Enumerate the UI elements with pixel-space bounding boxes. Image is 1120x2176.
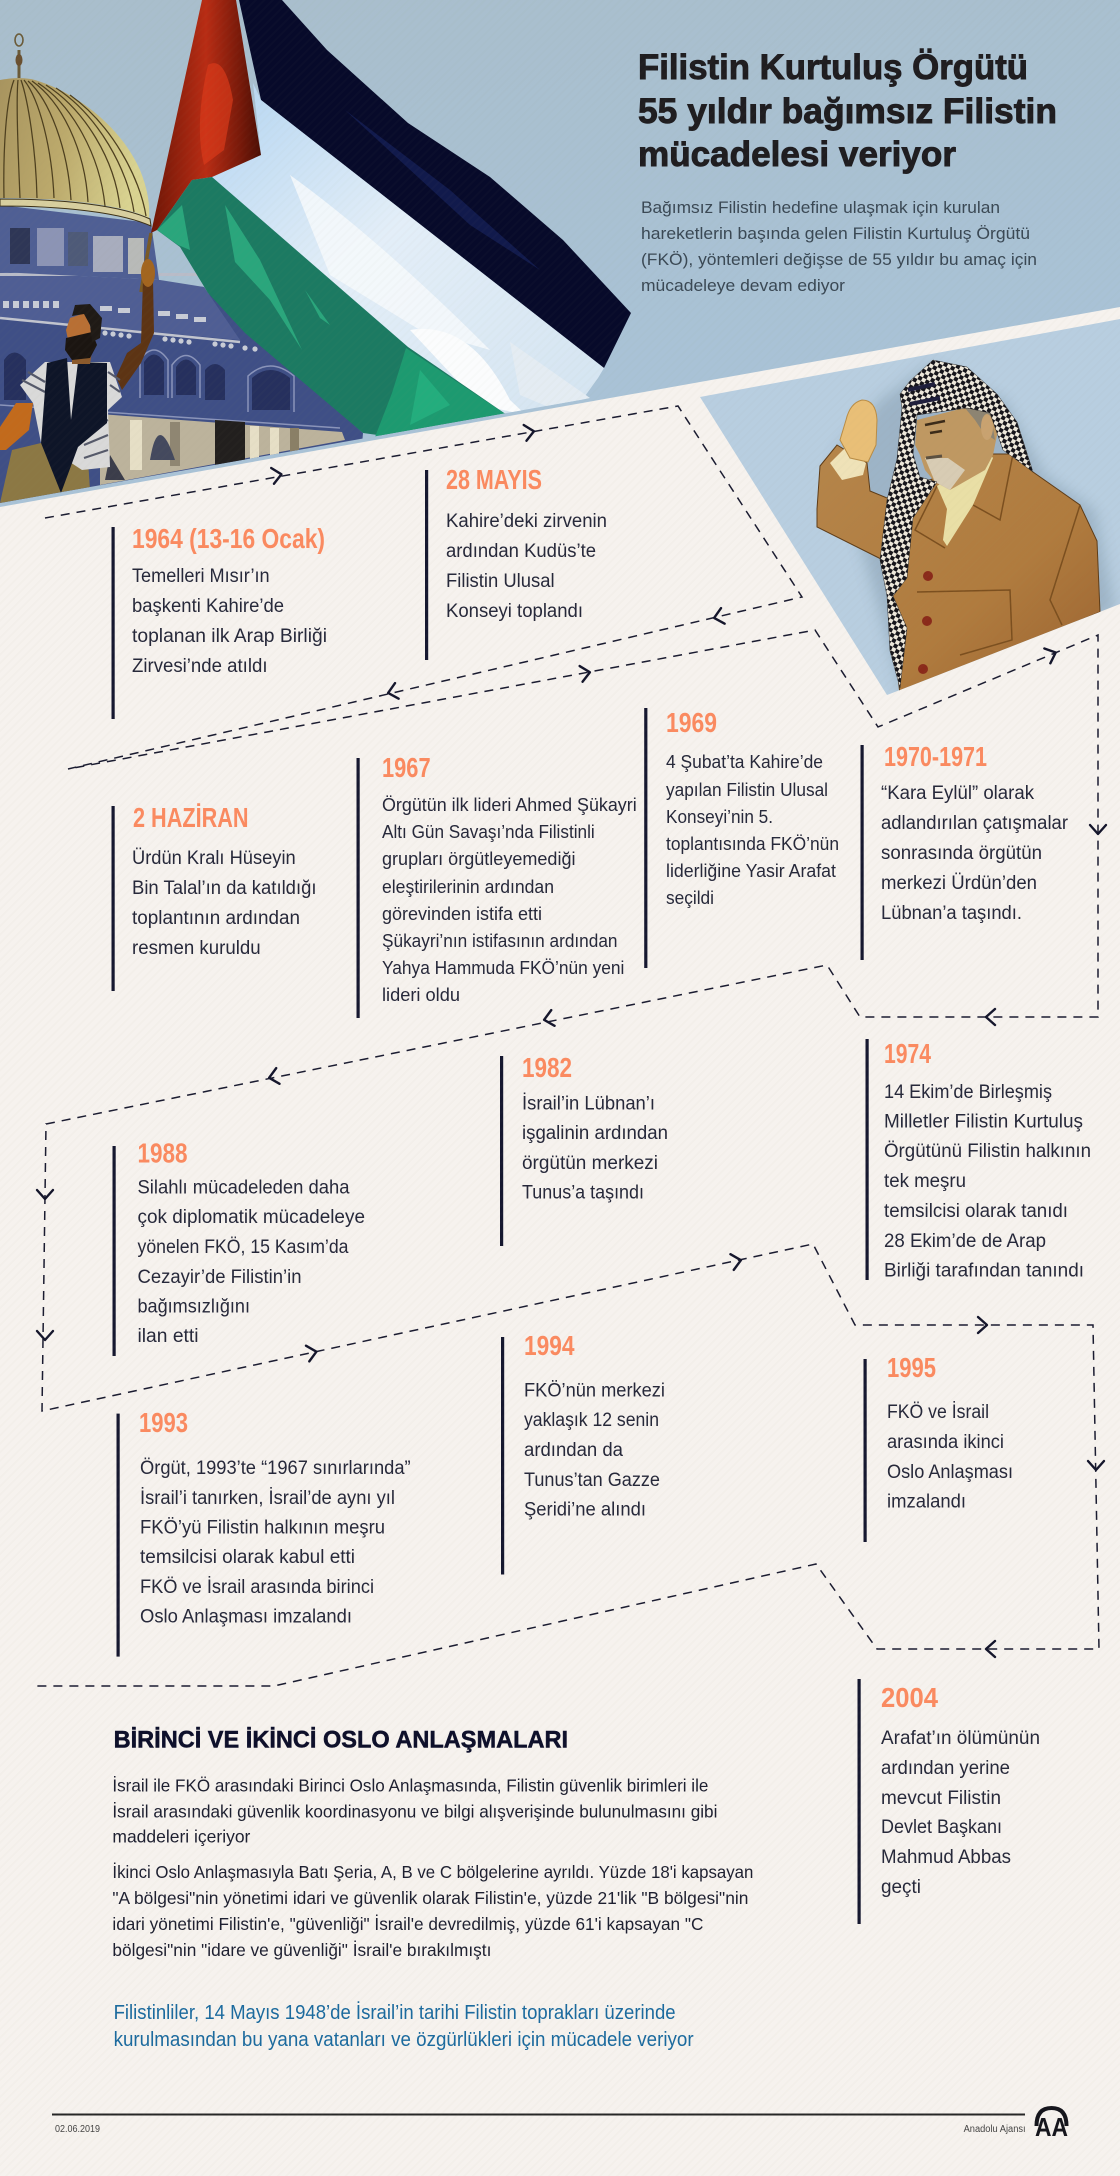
- body: 2004: ardından yerine: [881, 1758, 1010, 1779]
- oslo paragraph one: [112, 1775, 717, 1847]
- body: 1994: Tunus’tan Gazze: [524, 1470, 660, 1491]
- pants: [0, 443, 90, 503]
- body: 1970-1971: sonrasında örgütün: [881, 843, 1042, 864]
- heading: 1964: 1964 (13-16 Ocak): [132, 523, 325, 554]
- illustration: dome of the rock, protester and flag: [0, 0, 631, 510]
- body: 1967: Şükayri’nın istifasının ardından: [382, 931, 618, 951]
- portrait: yasir arafat saluting: [817, 360, 1115, 700]
- footer agency name: Anadolu Ajansı: [964, 2124, 1026, 2135]
- timeline entry: 1994: [501, 1330, 665, 1574]
- timeline entry: 1993: [116, 1407, 411, 1657]
- body: 1969: yapılan Filistin Ulusal: [666, 780, 828, 800]
- body: 1982: örgütün merkezi: [522, 1153, 658, 1174]
- body: 1982: işgalinin ardından: [522, 1123, 668, 1144]
- beard: [65, 332, 97, 360]
- title: 55 yıldır bağımsız Filistin: [638, 92, 1057, 131]
- hair: [965, 408, 995, 440]
- title: Filistin Kurtuluş Örgütü: [638, 48, 1028, 87]
- heading: 28 mayis: 28 MAYIS: [446, 464, 542, 495]
- intro text: hareketlerin başında gelen Filistin Kurtuluş Örgütü: [641, 224, 1030, 243]
- body: 2 haziran: resmen kuruldu: [132, 938, 261, 959]
- footer: [52, 2108, 1068, 2142]
- oslo paragraph two: bölgesi"nin "idare ve güvenliği" İsrail'e bırakılmıştı: [112, 1940, 491, 1960]
- body: 1970-1971: [881, 783, 1069, 924]
- cuff: [830, 448, 866, 480]
- person: protester raising flag: [0, 259, 155, 503]
- body: 1993: FKÖ ve İsrail arasında birinci: [140, 1577, 374, 1598]
- body: 1964: [132, 566, 327, 677]
- moustache: [926, 456, 942, 458]
- body: 1969: 4 Şubat’ta Kahire’de: [666, 752, 823, 772]
- eye and brow: [925, 421, 945, 433]
- body: 1994: yaklaşık 12 senin: [524, 1410, 659, 1431]
- body: 2 haziran: toplantının ardından: [132, 908, 300, 929]
- timeline path: dashed connectors with arrows: [33, 406, 1106, 1686]
- oslo paragraph two: [112, 1862, 753, 1960]
- heading: 2 haziran: 2 HAZİRAN: [133, 802, 248, 833]
- timeline entry: 1988: [112, 1138, 365, 1356]
- timeline entry: 2004: [858, 1679, 1040, 1924]
- heading: 1982: 1982: [522, 1052, 572, 1083]
- oslo heading: BİRİNCİ VE İKİNCİ OSLO ANLAŞMALARI: [114, 1727, 568, 1754]
- body: 1964: toplanan ilk Arap Birliği: [132, 626, 327, 647]
- body: 1970-1971: Lübnan’a taşındı.: [881, 903, 1022, 924]
- heading: 2004: 2004: [881, 1682, 938, 1713]
- body: 1974: tek meşru: [884, 1171, 966, 1192]
- shirt collar: [937, 454, 993, 546]
- flag: pole: [141, 233, 151, 292]
- body: 1993: Oslo Anlaşması imzalandı: [140, 1607, 352, 1628]
- beard: [925, 458, 965, 490]
- dashed route: [33, 406, 1099, 1686]
- body: 2 haziran: Ürdün Kralı Hüseyin: [132, 848, 296, 869]
- timeline entry: 1982: [500, 1052, 668, 1246]
- body: 1970-1971: adlandırılan çatışmalar: [881, 813, 1069, 834]
- body: 1982: [522, 1093, 668, 1204]
- body: 1988: ilan etti: [138, 1326, 198, 1347]
- timeline entry: 2 haziran: [112, 802, 316, 991]
- body: 28 mayis: Kahire’deki zirvenin: [446, 511, 607, 532]
- body: 28 mayis: [446, 511, 607, 622]
- body: 1967: görevinden istifa etti: [382, 904, 542, 924]
- heading: 1970-1971: 1970-1971: [884, 741, 987, 772]
- body: 1993: temsilcisi olarak kabul etti: [140, 1547, 355, 1568]
- body: 1993: FKÖ’yü Filistin halkının meşru: [140, 1517, 385, 1538]
- timeline entry: 1995: [864, 1352, 1013, 1542]
- body: 1974: temsilcisi olarak tanıdı: [884, 1201, 1068, 1222]
- body: 1967: Yahya Hammuda FKÖ’nün yeni: [382, 958, 624, 978]
- face: [915, 405, 1000, 490]
- body: 1994: ardından da: [524, 1440, 623, 1461]
- building: drum: [0, 205, 159, 280]
- header blue panel: [0, 0, 1120, 507]
- heading: 1974: 1974: [884, 1038, 931, 1069]
- body: 1969: Konseyi’nin 5.: [666, 807, 773, 827]
- body: 1994: [524, 1380, 665, 1521]
- body: 1974: 14 Ekim’de Birleşmiş: [884, 1082, 1052, 1103]
- body: 1988: Cezayir’de Filistin’in: [138, 1267, 302, 1288]
- keffiyeh: [880, 360, 1033, 688]
- body: 1988: Silahlı mücadeleden daha: [138, 1178, 350, 1199]
- portrait shadow: [835, 365, 1115, 700]
- coat: [817, 445, 1100, 695]
- intro text: mücadeleye devam ediyor: [641, 276, 845, 295]
- body: 1969: seçildi: [666, 888, 714, 908]
- body: 1970-1971: “Kara Eylül” olarak: [881, 783, 1034, 804]
- heading: 1995: 1995: [887, 1352, 936, 1383]
- section: oslo agreements: [112, 1727, 753, 1960]
- body: 28 mayis: Konseyi toplandı: [446, 601, 583, 622]
- body: 28 mayis: ardından Kudüs’te: [446, 541, 596, 562]
- body: 1994: FKÖ’nün merkezi: [524, 1380, 665, 1402]
- coat buttons: [918, 571, 933, 674]
- body: 2 haziran: [132, 848, 316, 959]
- body: 1974: Birliği tarafından tanındı: [884, 1260, 1084, 1282]
- arrow chevrons: [37, 423, 1106, 1657]
- body: 1982: İsrail’in Lübnan’ı: [522, 1093, 655, 1114]
- timeline entry: 1969: [644, 707, 839, 968]
- timeline entry: 1970-1971: [860, 741, 1069, 960]
- oslo paragraph two: idari yönetimi Filistin'e, "güvenliği" İsrail'e devredilmiş, yüzde 61'i kapsayan "C: [112, 1914, 703, 1934]
- body: 1967: Altı Gün Savaşı’nda Filistinli: [382, 822, 595, 842]
- head band: [908, 384, 940, 404]
- neck: [72, 356, 92, 364]
- body: 1995: [887, 1402, 1013, 1513]
- heading: 1969: 1969: [666, 707, 717, 738]
- body: 2004: mevcut Filistin: [881, 1788, 1001, 1809]
- body: 1970-1971: merkezi Ürdün’den: [881, 873, 1037, 894]
- intro text: (FKÖ), yöntemleri değişse de 55 yıldır bu amaç için: [641, 250, 1037, 269]
- building: golden dome: [0, 78, 151, 226]
- body: 1974: 28 Ekim’de de Arap: [884, 1231, 1046, 1252]
- timeline entry: 1967: [356, 752, 637, 1018]
- body: 1967: [382, 795, 637, 1005]
- body: 1993: İsrail’i tanırken, İsrail’de aynı yıl: [140, 1488, 395, 1509]
- oslo paragraph two: İkinci Oslo Anlaşmasıyla Batı Şeria, A, B ve C bölgelerine ayrıldı. Yüzde 18'i kapsayan: [112, 1862, 753, 1882]
- raised arm: [116, 280, 154, 390]
- hand: [141, 259, 155, 287]
- body: 1974: Milletler Filistin Kurtuluş: [884, 1112, 1083, 1132]
- body: 1967: eleştirilerinin ardından: [382, 877, 554, 897]
- face: [66, 314, 91, 338]
- hand: [840, 400, 877, 462]
- oslo paragraph two: "A bölgesi"nin yönetimi idari ve güvenlik olarak Filistin'e, yüzde 21'lik "B bölgesi"nin: [112, 1888, 748, 1908]
- title: mücadelesi veriyor: [638, 135, 956, 174]
- body: 1993: [140, 1458, 411, 1628]
- body: 1988: çok diplomatik mücadeleye: [138, 1207, 365, 1228]
- body: 1995: arasında ikinci: [887, 1432, 1004, 1453]
- striped shirt: [20, 362, 122, 470]
- oslo paragraph one: İsrail ile FKÖ arasındaki Birinci Oslo Anlaşmasında, Filistin güvenlik birimleri ile: [112, 1775, 708, 1795]
- intro text: [641, 198, 1037, 295]
- icon: dome spire: [15, 34, 23, 78]
- body: 1994: Şeridi’ne alındı: [524, 1500, 646, 1521]
- title: [638, 48, 1057, 174]
- flag: green stripe: [157, 177, 510, 437]
- body: 1967: Örgütün ilk lideri Ahmed Şükayri: [382, 795, 637, 815]
- body: 2004: [881, 1728, 1040, 1898]
- body: 1974: [884, 1082, 1091, 1282]
- body: 2004: geçti: [881, 1877, 921, 1898]
- body: 2004: Mahmud Abbas: [881, 1847, 1011, 1868]
- flag: black stripe: [239, 0, 631, 368]
- body: 1969: liderliğine Yasir Arafat: [666, 861, 836, 881]
- body: 1982: Tunus’a taşındı: [522, 1183, 644, 1204]
- oslo paragraph one: İsrail arasındaki güvenlik koordinasyonu ve bilgi alışverişinde bulunulmasını gibi: [112, 1802, 717, 1822]
- closing blue statement: [114, 2001, 694, 2051]
- body: 1967: grupları örgütleyemediği: [382, 849, 576, 869]
- heading: 1967: 1967: [382, 752, 431, 783]
- body: 1993: Örgüt, 1993’te “1967 sınırlarında”: [140, 1458, 411, 1479]
- arafat blue panel: [700, 319, 1120, 695]
- body: 2004: Arafat’ın ölümünün: [881, 1728, 1040, 1749]
- body: 1964: Temelleri Mısır’ın: [132, 566, 270, 587]
- closing blue statement: Filistinliler, 14 Mayıs 1948’de İsrail’in tarihi Filistin toprakları üzerinde: [114, 2001, 676, 2024]
- body: 28 mayis: Filistin Ulusal: [446, 571, 555, 592]
- coat details: [915, 454, 1080, 655]
- body: 1974: Örgütünü Filistin halkının: [884, 1141, 1091, 1162]
- timeline entry: 28 mayis: [425, 464, 607, 660]
- footer date: 02.06.2019: [55, 2124, 100, 2135]
- body: 1967: lideri oldu: [382, 985, 460, 1005]
- intro text: Bağımsız Filistin hedefine ulaşmak için kurulan: [641, 198, 1000, 217]
- timeline entry: 1974: [866, 1038, 1091, 1282]
- closing blue statement: kurulmasından bu yana vatanları ve özgürlükleri için mücadele veriyor: [114, 2029, 694, 2051]
- body: 1995: Oslo Anlaşması: [887, 1462, 1013, 1483]
- ear: [981, 414, 993, 440]
- body: 1969: [666, 752, 839, 908]
- body: 1969: toplantısında FKÖ’nün: [666, 834, 839, 854]
- body: 1988: bağımsızlığını: [138, 1296, 250, 1318]
- flag: red triangle: [151, 0, 261, 233]
- body: 1964: Zirvesi’nde atıldı: [132, 656, 268, 677]
- body: 2 haziran: Bin Talal’ın da katıldığı: [132, 878, 316, 899]
- body: 1964: başkenti Kahire’de: [132, 596, 284, 617]
- body: 2004: Devlet Başkanı: [881, 1817, 1002, 1838]
- heading: 1993: 1993: [139, 1407, 188, 1438]
- heading: 1994: 1994: [524, 1330, 575, 1361]
- oslo paragraph one: maddeleri içeriyor: [112, 1827, 251, 1847]
- left arm: [0, 403, 33, 450]
- body: 1995: FKÖ ve İsrail: [887, 1402, 989, 1423]
- heading: 1988: 1988: [138, 1138, 188, 1168]
- body: 1995: imzalandı: [887, 1492, 966, 1513]
- flag: white stripe: [212, 83, 604, 417]
- body: 1988: [138, 1178, 365, 1347]
- timeline entry: 1964: [112, 523, 327, 719]
- building: octagonal wall: [0, 272, 363, 510]
- black vest: [41, 358, 107, 493]
- body: 1988: yönelen FKÖ, 15 Kasım’da: [138, 1237, 349, 1258]
- hair: [72, 304, 102, 342]
- icon: anadolu agency logo: AA: [1035, 2112, 1068, 2142]
